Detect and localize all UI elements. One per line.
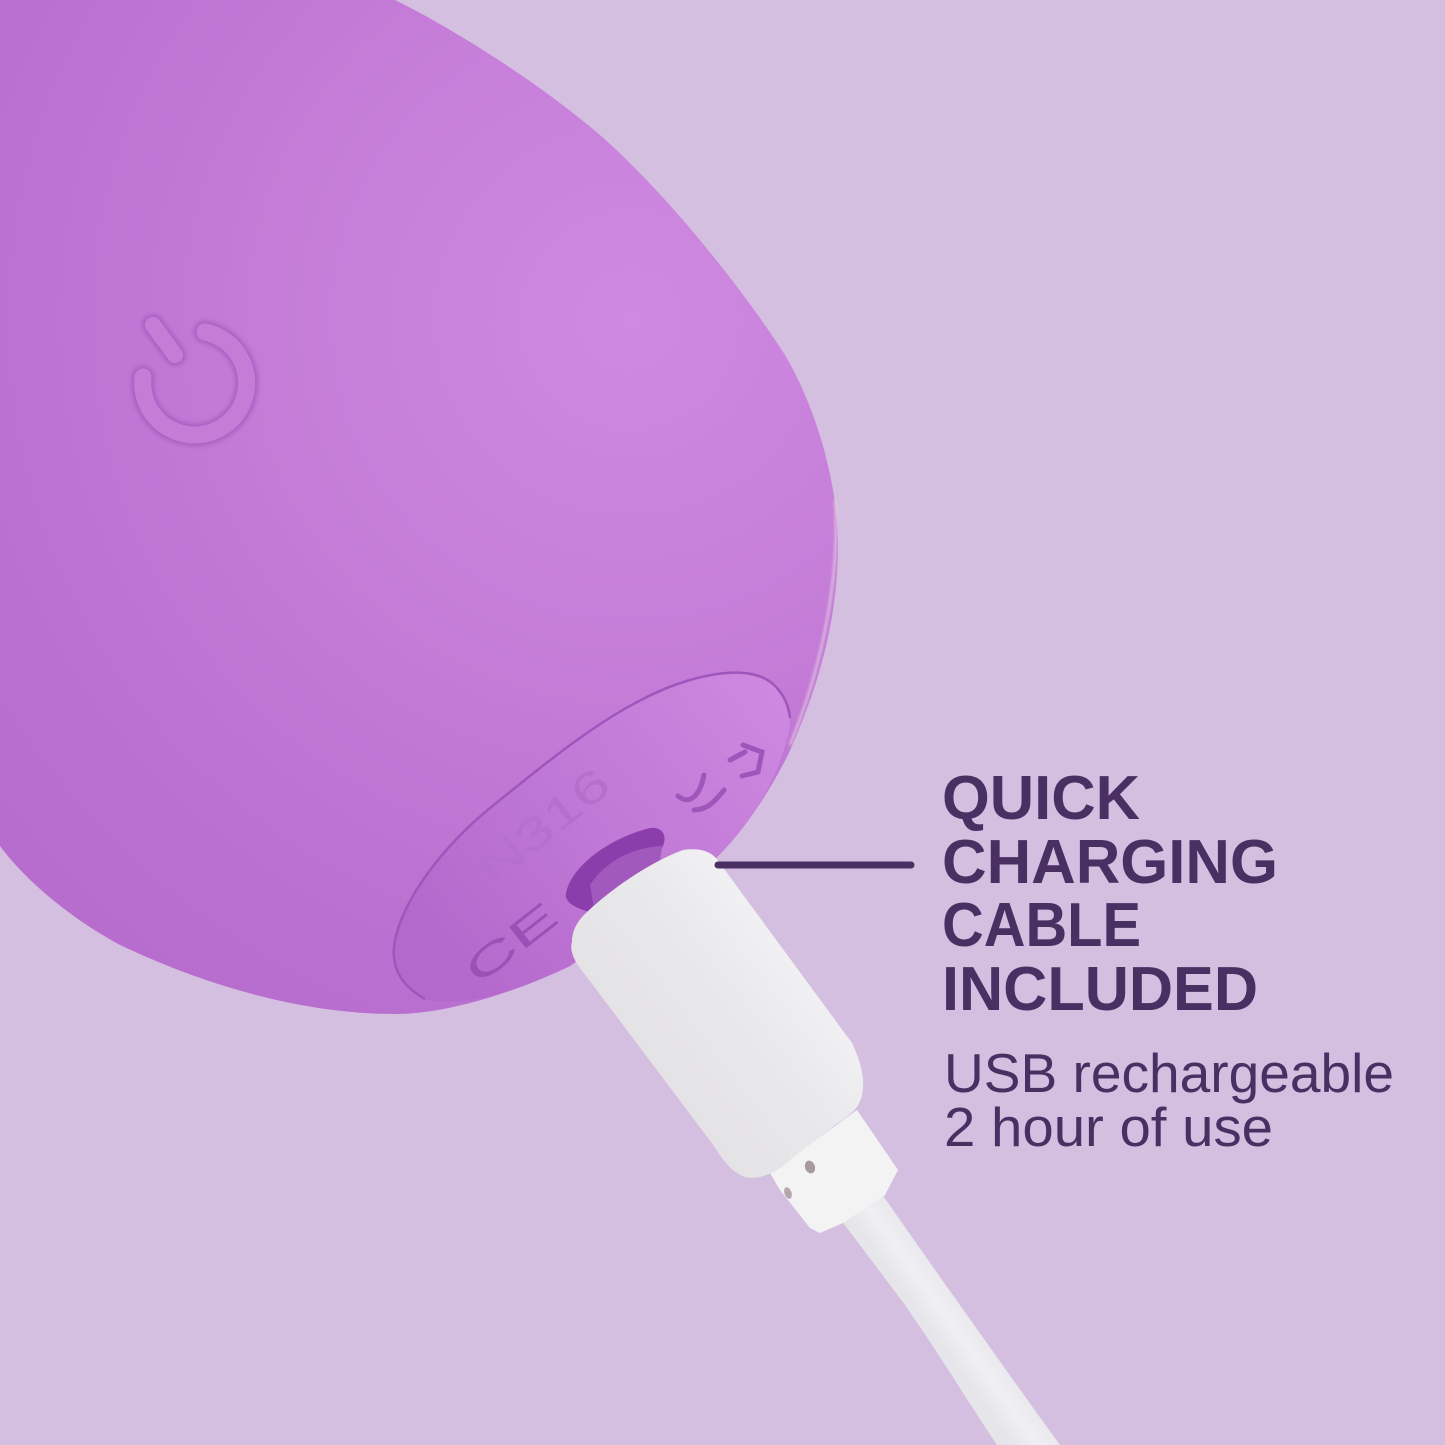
plug collar [770,1110,898,1233]
vent holes [803,1159,817,1175]
description text [944,1043,1394,1158]
heading: CABLE [942,891,1141,960]
heading [942,764,1278,1024]
engraved marking N316: N316 [469,758,620,894]
power symbol embossed [143,325,247,435]
leader line [718,862,911,868]
device body [0,0,838,1014]
cable wire [832,1180,1060,1445]
charging port hole [566,828,665,914]
description text: USB rechargeable [944,1043,1394,1104]
edge highlight [790,500,836,745]
engraved marks right side [678,745,762,810]
heading: INCLUDED [942,955,1258,1024]
heading: QUICK [942,764,1140,833]
charging port disc [394,673,790,1002]
heading: CHARGING [942,828,1278,897]
device: purple rounded body with charging port [0,0,838,1014]
engraved CE mark: CE [456,893,566,993]
description text: 2 hour of use [944,1097,1273,1158]
plug body [571,849,863,1178]
white USB plug [571,849,898,1233]
